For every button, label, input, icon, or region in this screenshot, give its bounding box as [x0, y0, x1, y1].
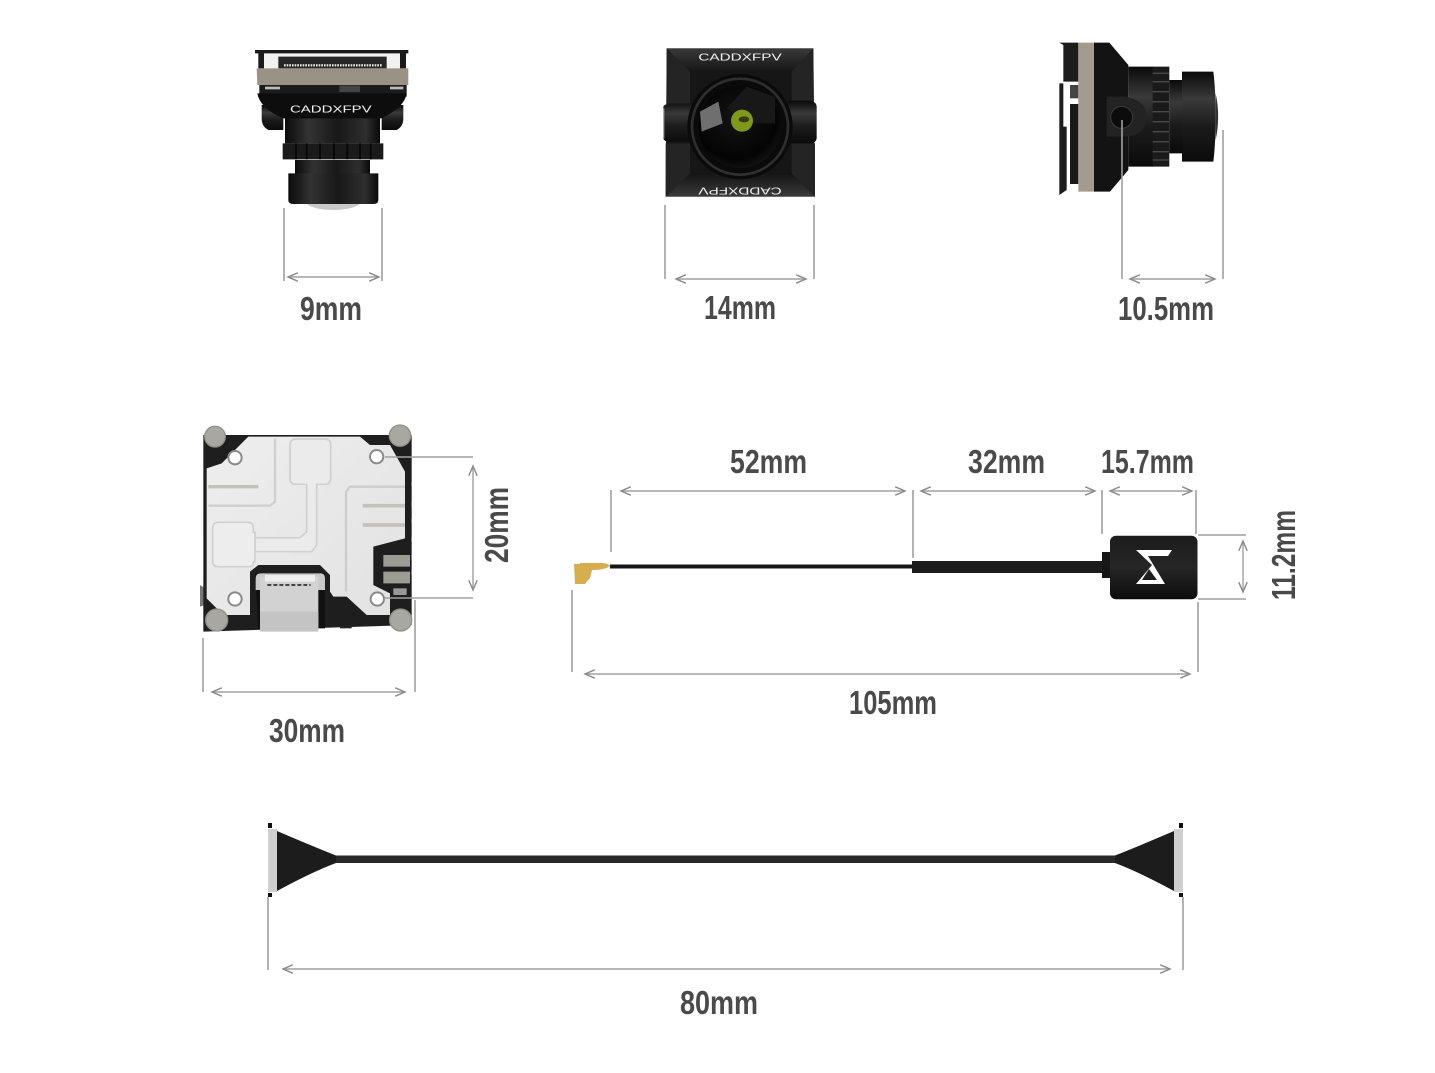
ribbon cable — [268, 823, 1183, 897]
VTX board — [200, 425, 417, 632]
dimension: 30mm — [203, 600, 415, 749]
standoffs and holes — [205, 425, 412, 631]
left connector — [268, 823, 336, 897]
dimension: 20mm: 20mm — [478, 487, 515, 563]
icon: antenna logo — [1136, 550, 1172, 584]
dimension: 9mm: 9mm — [300, 290, 362, 327]
dimension: 105mm — [572, 590, 1198, 721]
silver plate — [207, 437, 405, 615]
camera: front top view — [255, 50, 408, 210]
dimension: 20mm — [385, 457, 515, 598]
antenna — [574, 536, 1198, 599]
USB-C port — [255, 573, 325, 632]
dimension: 52mm: 52mm — [730, 443, 807, 480]
logo text: CADDXFPV — [290, 105, 372, 116]
dimension: 80mm: 80mm — [680, 984, 758, 1021]
dimension: 10.5mm: 10.5mm — [1118, 290, 1214, 327]
dimension: 80mm — [268, 897, 1183, 1021]
logo text: top: CADDXFPV — [698, 53, 782, 64]
dimension: 10.5mm — [1118, 120, 1223, 327]
dimension: 9mm — [284, 208, 382, 327]
dimension: 15.7mm: 15.7mm — [1101, 443, 1194, 480]
dimension: 15.7mm — [1101, 443, 1196, 534]
logo text: bottom inverted: CADDXFPV — [698, 184, 782, 195]
camera: side view — [1059, 43, 1218, 195]
dimension: 14mm — [665, 205, 814, 326]
connector — [574, 563, 610, 584]
dimension: 32mm: 32mm — [968, 443, 1045, 480]
dimension: 11.2mm — [1198, 510, 1302, 600]
dimension: 11.2mm: 11.2mm — [1265, 510, 1302, 600]
camera: front view — [663, 48, 817, 197]
dimension: 14mm: 14mm — [704, 289, 776, 326]
dimension: 30mm: 30mm — [269, 712, 345, 749]
right connector — [1115, 823, 1183, 897]
dimension: 105mm: 105mm — [849, 684, 937, 721]
